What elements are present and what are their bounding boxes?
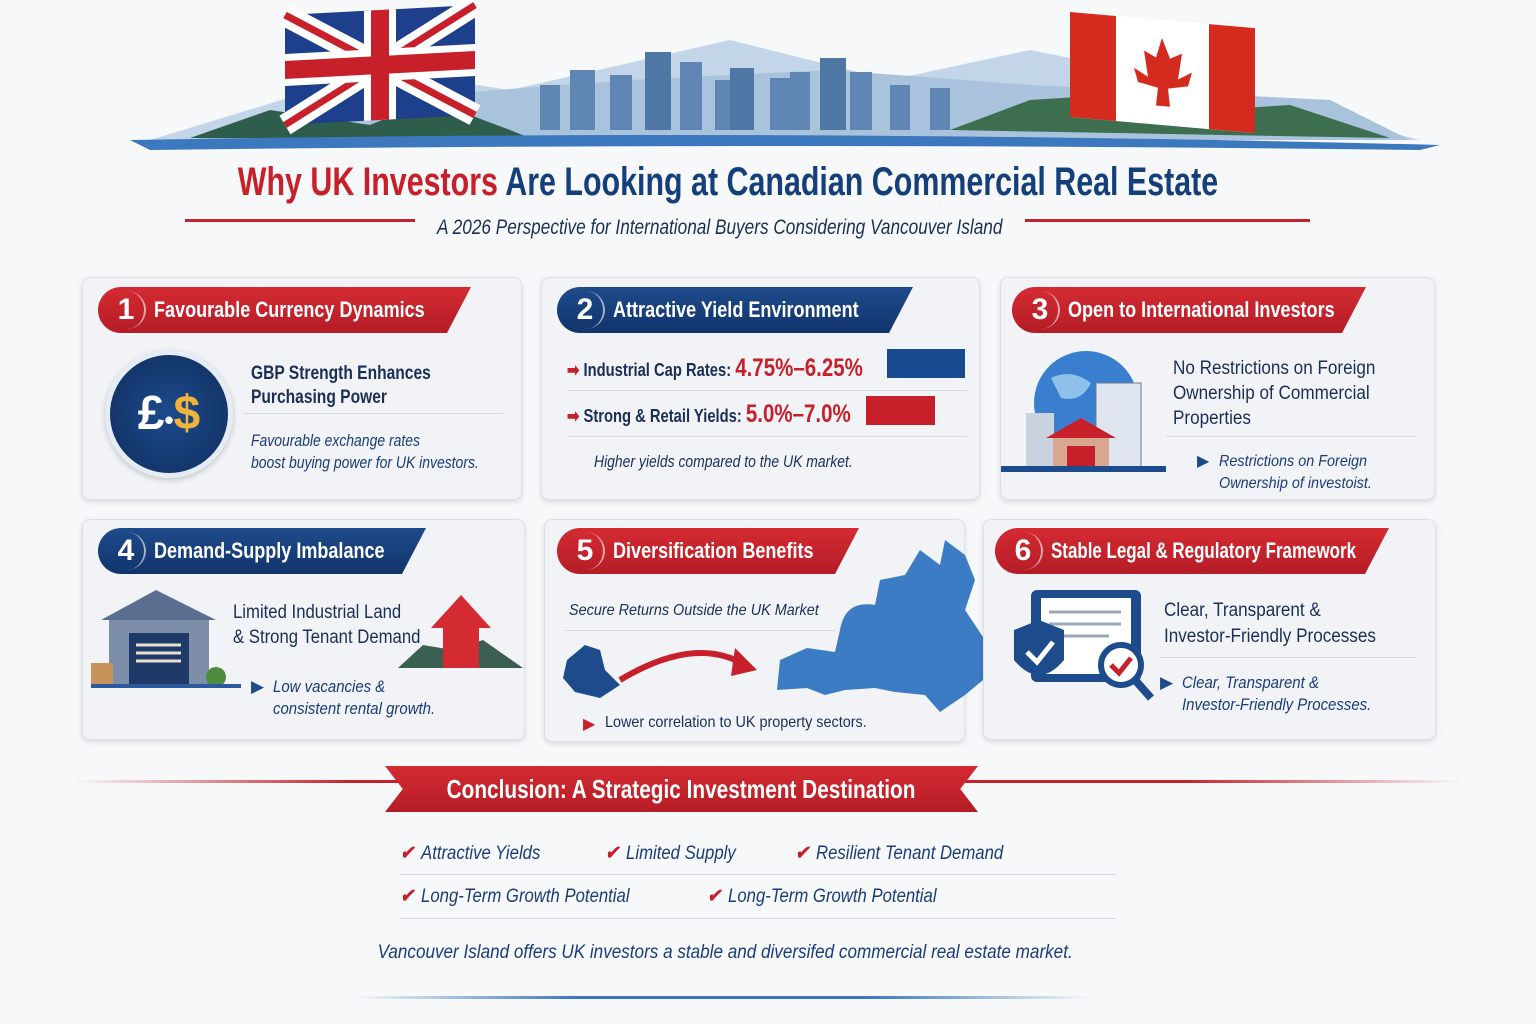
heading 2: 2 (577, 293, 593, 326)
panel 4: demand supply: consistent rental growth. (273, 699, 435, 718)
panel 1: currency: Favourable exchange rates (251, 431, 420, 450)
panel 4: demand supply: Limited Industrial Land (233, 602, 401, 623)
title: Why UK Investors Are Looking at Canadian Commercial Real Estate (238, 160, 1218, 204)
heading 3: Open to International Investors (1068, 297, 1335, 322)
conclusion banner (86, 766, 1450, 812)
heading 1: Favourable Currency Dynamics (154, 297, 425, 322)
panel 5: diversification: Lower correlation to UK property sectors. (605, 714, 867, 731)
text: Purchasing Power (251, 387, 387, 408)
heading 3 (1012, 287, 1366, 333)
icon: currency globe: £•$ (138, 387, 200, 440)
heading 2: Attractive Yield Environment (613, 297, 859, 322)
heading 5 (557, 528, 859, 574)
header skyline illustration (130, 2, 1440, 150)
checklist (400, 843, 1116, 919)
panel 6: legal (983, 519, 1436, 740)
panel 3: international (1000, 277, 1435, 500)
checklist: ✔ Attractive Yields (400, 843, 540, 864)
heading 4: Demand-Supply Imbalance (154, 538, 385, 563)
panel 4: demand supply (82, 519, 525, 740)
icon: warehouse (91, 590, 241, 688)
panel 4: demand supply: ▶ (251, 677, 264, 696)
checklist: ✔ Long-Term Growth Potential (707, 886, 937, 907)
icon: document shield (1014, 590, 1154, 701)
panel 4: demand supply: & Strong Tenant Demand (233, 627, 420, 648)
panel 6: legal: Clear, Transparent & (1164, 600, 1321, 621)
panel 2: yields (541, 277, 980, 500)
panel 4: demand supply: Low vacancies & (273, 677, 385, 696)
heading 4 (98, 528, 426, 574)
panel 2: yields: Higher yields compared to the UK market. (594, 452, 853, 471)
yield rows: ➡ Industrial Cap Rates: 4.75%–6.25% (567, 354, 863, 382)
panel 6: legal: Investor-Friendly Processes (1164, 626, 1376, 647)
heading 5: Diversification Benefits (613, 538, 814, 563)
panel 1: currency: boost buying power for UK investors. (251, 453, 479, 472)
subtitle (185, 216, 1310, 239)
text (1173, 358, 1375, 429)
text: GBP Strength Enhances (251, 363, 431, 384)
heading 1 (98, 287, 471, 333)
checklist: ✔ Long-Term Growth Potential (400, 886, 630, 907)
text: Properties (1173, 408, 1251, 429)
text (251, 363, 431, 408)
panel 3: international: ▶ (1197, 453, 1209, 470)
heading 6: 6 (1015, 534, 1031, 567)
text: Ownership of Commercial (1173, 383, 1370, 404)
heading 3: 3 (1032, 293, 1048, 326)
checklist: ✔ Limited Supply (605, 843, 736, 864)
panel 5: diversification: Secure Returns Outside the UK Market (569, 602, 819, 619)
heading 2 (557, 287, 913, 333)
panel 6: legal: ▶ (1160, 673, 1173, 692)
heading 6 (995, 528, 1389, 574)
icon: currency globe (105, 350, 233, 478)
panel 3: international: Restrictions on Foreign (1219, 453, 1367, 470)
panel 2: yields: ➡ Strong & Retail Yields: 5.0%–7.0% (567, 400, 851, 428)
heading 4: 4 (118, 534, 134, 567)
icon: globe and buildings (1001, 351, 1166, 472)
heading 6: Stable Legal & Regulatory Framework (1051, 538, 1356, 563)
subtitle: A 2026 Perspective for International Buyers Considering Vancouver Island (437, 216, 1003, 239)
heading 1: 1 (118, 293, 134, 326)
panel 3: international: Ownership of investoist. (1219, 475, 1372, 492)
panel 1: currency (82, 277, 522, 500)
closing statement: Vancouver Island offers UK investors a stable and diversifed commercial real estate market. (377, 942, 1073, 963)
map: UK to Canada (563, 540, 983, 712)
icon: rising arrow (398, 595, 523, 668)
panel 5: diversification: ▶ (583, 716, 595, 733)
heading 5: 5 (577, 534, 593, 567)
checklist: ✔ Resilient Tenant Demand (795, 843, 1003, 864)
conclusion banner: Conclusion: A Strategic Investment Destination (447, 774, 916, 804)
text: No Restrictions on Foreign (1173, 358, 1375, 379)
panel 6: legal: Clear, Transparent & (1182, 673, 1319, 692)
panel 6: legal: Investor-Friendly Processes. (1182, 695, 1371, 714)
panel 5: diversification (544, 519, 965, 742)
